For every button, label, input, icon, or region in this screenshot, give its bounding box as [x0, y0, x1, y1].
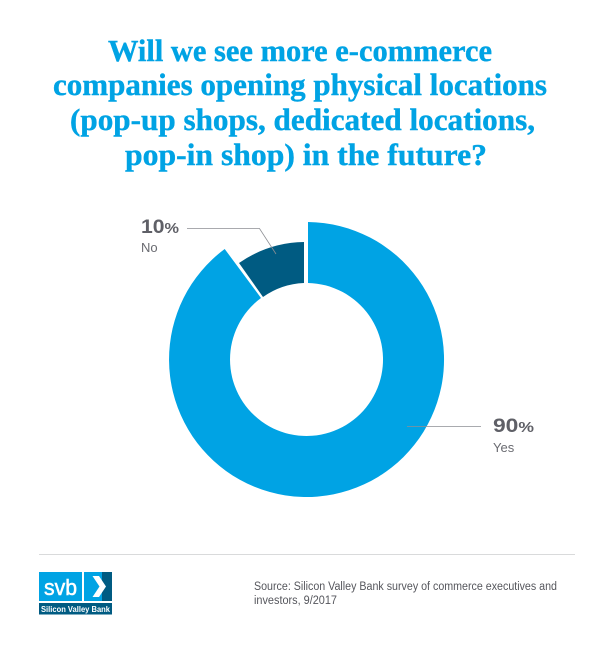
donut chart	[169, 222, 444, 497]
callout: 10% No: No	[141, 240, 158, 255]
source note	[254, 581, 557, 607]
title: companies opening physical locations	[53, 67, 547, 102]
title	[53, 33, 547, 172]
callout: 10% No: 10%	[141, 216, 179, 238]
callout: 90% Yes: 90%	[493, 415, 534, 437]
leader line to Yes slice	[407, 426, 481, 428]
logo: Silicon Valley Bank: svb	[44, 575, 77, 600]
callout: 90% Yes: Yes	[493, 440, 515, 455]
divider	[39, 554, 575, 555]
callout: 10% No	[141, 216, 276, 255]
source note: Source: Silicon Valley Bank survey of commerce executives and	[254, 581, 557, 593]
slice: Yes 90%	[169, 222, 444, 497]
leader line to No slice	[187, 228, 276, 254]
logo: Silicon Valley Bank	[39, 572, 112, 614]
source note: investors, 9/2017	[254, 595, 337, 607]
slice: No 10%	[239, 242, 304, 297]
title: pop-in shop) in the future?	[125, 137, 487, 172]
title: (pop-up shops, dedicated locations,	[70, 102, 535, 137]
callout: 90% Yes	[407, 415, 534, 455]
title: Will we see more e-commerce	[108, 33, 492, 68]
logo: Silicon Valley Bank: Silicon Valley Bank	[41, 604, 110, 614]
